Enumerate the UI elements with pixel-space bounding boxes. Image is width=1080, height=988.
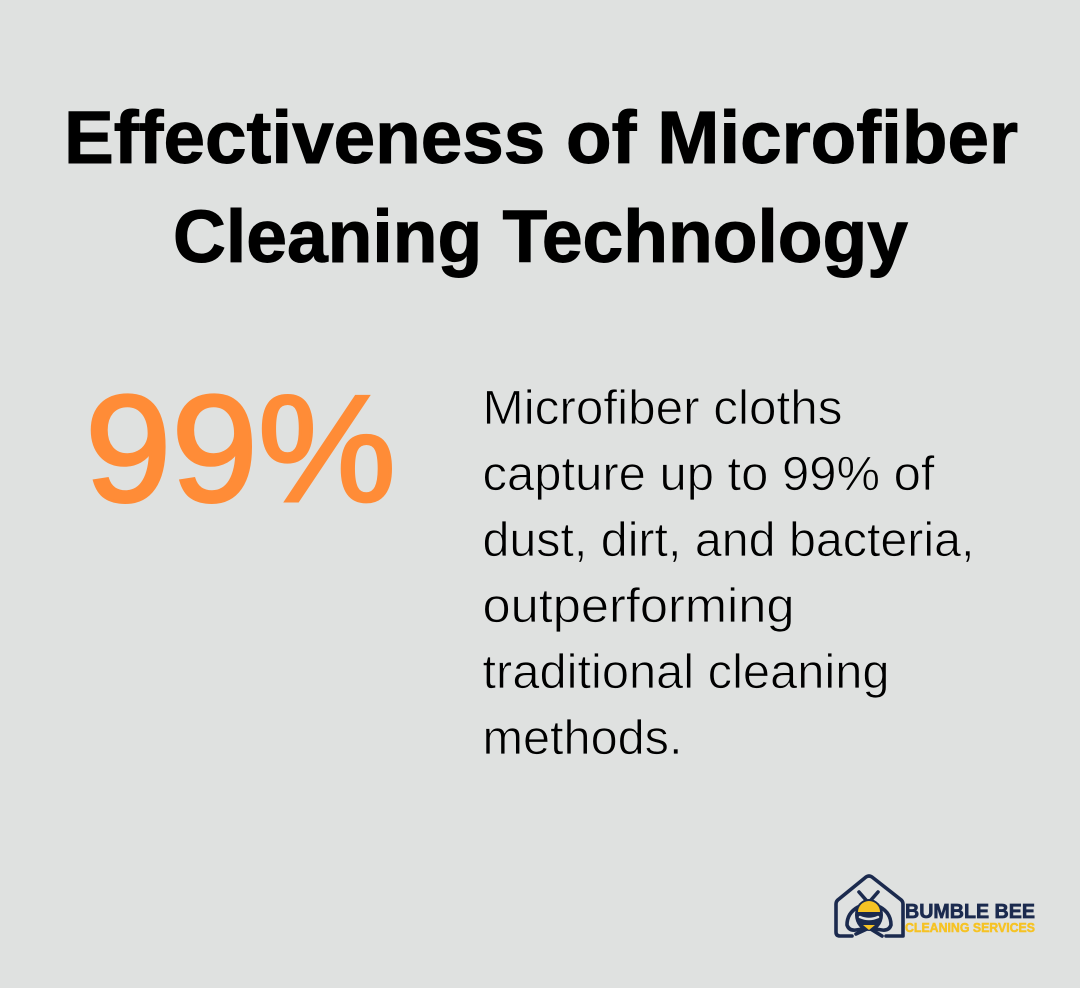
logo wordmark: BUMBLE BEE bbox=[905, 900, 1035, 923]
title: Cleaning Technology bbox=[173, 195, 908, 278]
logo tagline: CLEANING SERVICES bbox=[905, 921, 1035, 935]
logo bbox=[836, 876, 1035, 936]
description text: methods. bbox=[482, 712, 682, 765]
description text: traditional cleaning bbox=[482, 646, 890, 699]
description text: dust, dirt, and bacteria, bbox=[482, 514, 974, 567]
description text: outperforming bbox=[482, 580, 794, 633]
icon: house with bee bbox=[836, 876, 903, 936]
description text: Microfiber cloths bbox=[482, 382, 842, 435]
title bbox=[64, 96, 1018, 278]
title: Effectiveness of Microfiber bbox=[64, 96, 1018, 179]
description text: capture up to 99% of bbox=[482, 448, 935, 501]
description text bbox=[482, 382, 974, 765]
big statistic: 99% bbox=[85, 364, 396, 534]
